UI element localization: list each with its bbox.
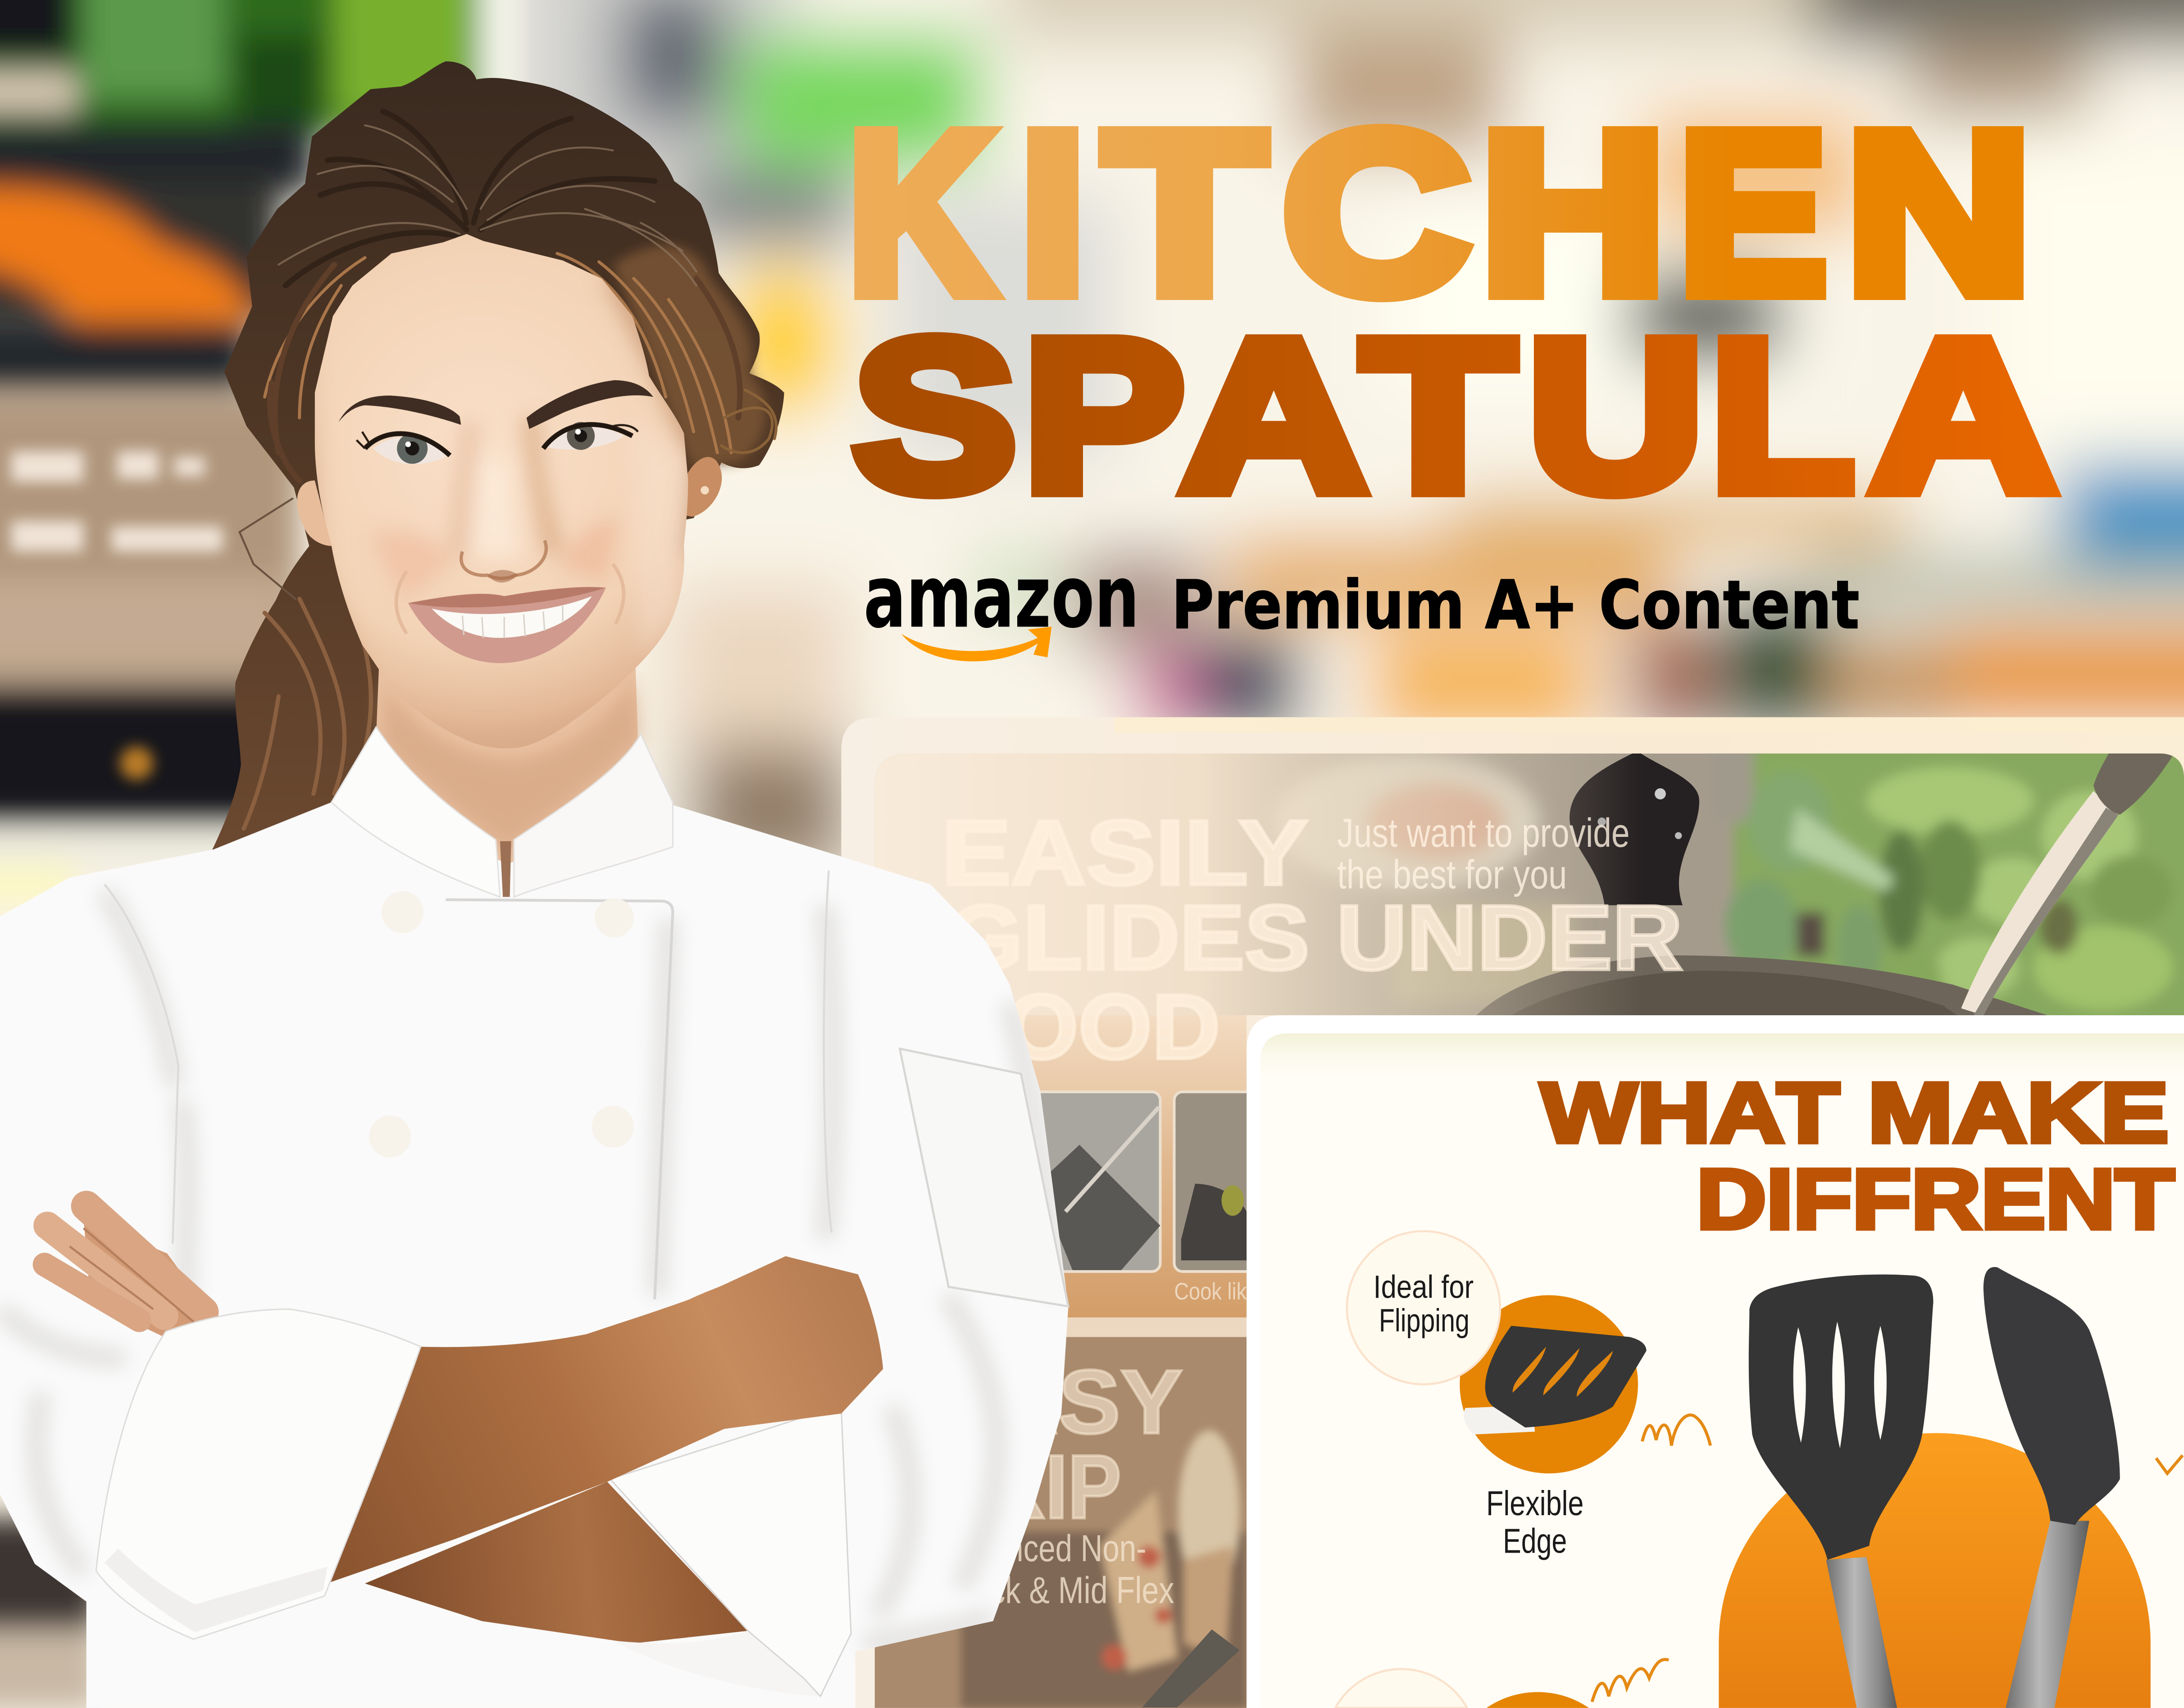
left cream fade — [875, 754, 1643, 1015]
spatula handle — [1961, 754, 2174, 1015]
label: flexible edge: Flexible — [1486, 1484, 1583, 1523]
nose — [461, 541, 546, 582]
title line: SPATULA: A — [1870, 295, 2056, 535]
label bubble: ideal for flipping: Flipping — [1379, 1303, 1470, 1339]
feature circle, bottom — [1487, 1692, 1589, 1708]
hair strands — [240, 111, 776, 829]
chef woman in white coat — [0, 61, 1068, 1708]
amazon logo: amazon — [864, 547, 1139, 647]
title: Kitchen Spatula — [848, 86, 2056, 535]
panel tagline — [1337, 811, 1629, 898]
card inner — [1260, 1033, 2184, 1708]
panel heading: Easily slides under food: FOOD — [947, 976, 1220, 1078]
left sleeve cuff shading — [105, 1549, 328, 1632]
chef coat — [0, 727, 1068, 1708]
small photo: induction cooktop — [1010, 1092, 1160, 1272]
title line: KITCHEN: T — [1105, 86, 1265, 341]
icon: solid spatula — [1984, 1267, 2120, 1708]
frying pan — [1476, 955, 2048, 1015]
face — [292, 223, 717, 766]
icon: slotted spatula — [1749, 1275, 1933, 1708]
feature bubble, bottom — [1335, 1669, 1467, 1708]
caption: Cook like: Cook lik — [1174, 1278, 1247, 1305]
title line: SPATULA: T — [1362, 295, 1514, 535]
face shading — [292, 265, 717, 759]
upper forearm and hand — [310, 1256, 883, 1589]
panel heading: Easily slides under food: EASILY — [942, 801, 1308, 904]
title line: SPATULA: A — [1181, 295, 1366, 535]
subtitle: amazon premium a+ content — [864, 547, 1860, 661]
heading: What make diffrent — [1541, 1065, 2174, 1246]
buttons — [369, 891, 634, 1157]
lower text: advanced non-stick — [937, 1527, 1174, 1611]
label bubble: ideal for flipping — [1347, 1231, 1500, 1384]
title line: KITCHEN: E — [1679, 86, 1827, 341]
coat shading — [0, 891, 1059, 1643]
premium a+ content text: Premium A+ Content — [1171, 566, 1860, 644]
panel tagline: Just want to provide — [1337, 811, 1629, 856]
under cuff — [613, 1631, 820, 1696]
feature: flexible edge — [1347, 1231, 1711, 1560]
title line: KITCHEN: H — [1481, 86, 1666, 341]
panel top strip — [1114, 717, 2184, 732]
panel heading: Easily slides under food: GLIDES UNDER — [947, 886, 1683, 989]
coat pocket — [900, 1049, 1068, 1306]
left cuff sleeve — [96, 1309, 421, 1639]
left hand fingers — [45, 1206, 216, 1340]
title line: KITCHEN: K — [848, 86, 993, 341]
title line: SPATULA — [853, 295, 2056, 535]
coat creases — [105, 870, 832, 1244]
orange circle — [1460, 1295, 1638, 1473]
lower text: advanced non-stick: Advanced Non- — [937, 1527, 1147, 1569]
right cuff sleeve — [610, 1409, 851, 1696]
eyes — [357, 422, 638, 464]
lighter brown side hair — [613, 245, 766, 467]
lower heading: Easy grip — [925, 1351, 1183, 1537]
title line: SPATULA: L — [1711, 295, 1854, 535]
panel: front what makes different card — [1247, 1015, 2184, 1708]
lower photo with food — [875, 1337, 1247, 1708]
title line: KITCHEN — [848, 86, 2031, 341]
orange arch behind spatulas — [1719, 1433, 2151, 1708]
panel frame — [841, 717, 2184, 1708]
squiggle accent right — [2156, 1455, 2183, 1473]
mouth — [408, 587, 606, 663]
title line: KITCHEN: C — [1283, 86, 1470, 341]
heading: What make diffrent: DIFFRENT — [1697, 1151, 2174, 1246]
lower heading: Easy grip: GRIP — [925, 1436, 1121, 1537]
panel tagline: the best for you — [1337, 853, 1567, 898]
divider band — [875, 1317, 1247, 1337]
neck shadow — [383, 676, 641, 849]
squiggle accent — [1642, 1415, 1711, 1445]
eyebrows — [338, 380, 653, 429]
label: flexible edge — [1486, 1484, 1583, 1560]
icon: spatula head close-up — [1464, 1326, 1647, 1435]
coat placket — [446, 899, 673, 1299]
smile lines — [396, 564, 623, 634]
hair back and ponytail — [212, 61, 784, 851]
lower text: advanced non-stick: Stick & Mid Flex — [954, 1569, 1174, 1611]
lower tan area — [875, 1015, 1247, 1317]
lower forearm — [365, 1482, 748, 1643]
neck — [348, 654, 669, 891]
squiggle accent bottom — [1592, 1659, 1669, 1702]
top photo with spatula, herbs and pan — [875, 753, 2184, 1015]
lower heading: Easy grip: EASY — [929, 1351, 1183, 1453]
label: flexible edge: Edge — [1503, 1522, 1567, 1560]
panel: back A+ module card — [841, 717, 2184, 1708]
collar — [332, 727, 673, 897]
herbs — [1712, 738, 2184, 1031]
title line: SPATULA: P — [1024, 295, 1184, 535]
ear — [684, 457, 722, 517]
panel heading: Easily slides under food — [942, 801, 1683, 1078]
label bubble: ideal for flipping: Ideal for — [1374, 1270, 1474, 1305]
amazon logo — [864, 547, 1139, 661]
left ear — [297, 481, 332, 546]
title line: KITCHEN: I — [1020, 86, 1086, 341]
heading: What make diffrent: WHAT MAKE — [1541, 1065, 2169, 1160]
title line: SPATULA: U — [1528, 295, 1703, 535]
small photo: cooking pan — [1174, 1092, 1258, 1272]
pepper mill — [1570, 754, 1699, 905]
title line: KITCHEN: N — [1846, 86, 2031, 341]
title line: SPATULA: S — [853, 295, 1016, 535]
card frame — [1247, 1015, 2184, 1708]
